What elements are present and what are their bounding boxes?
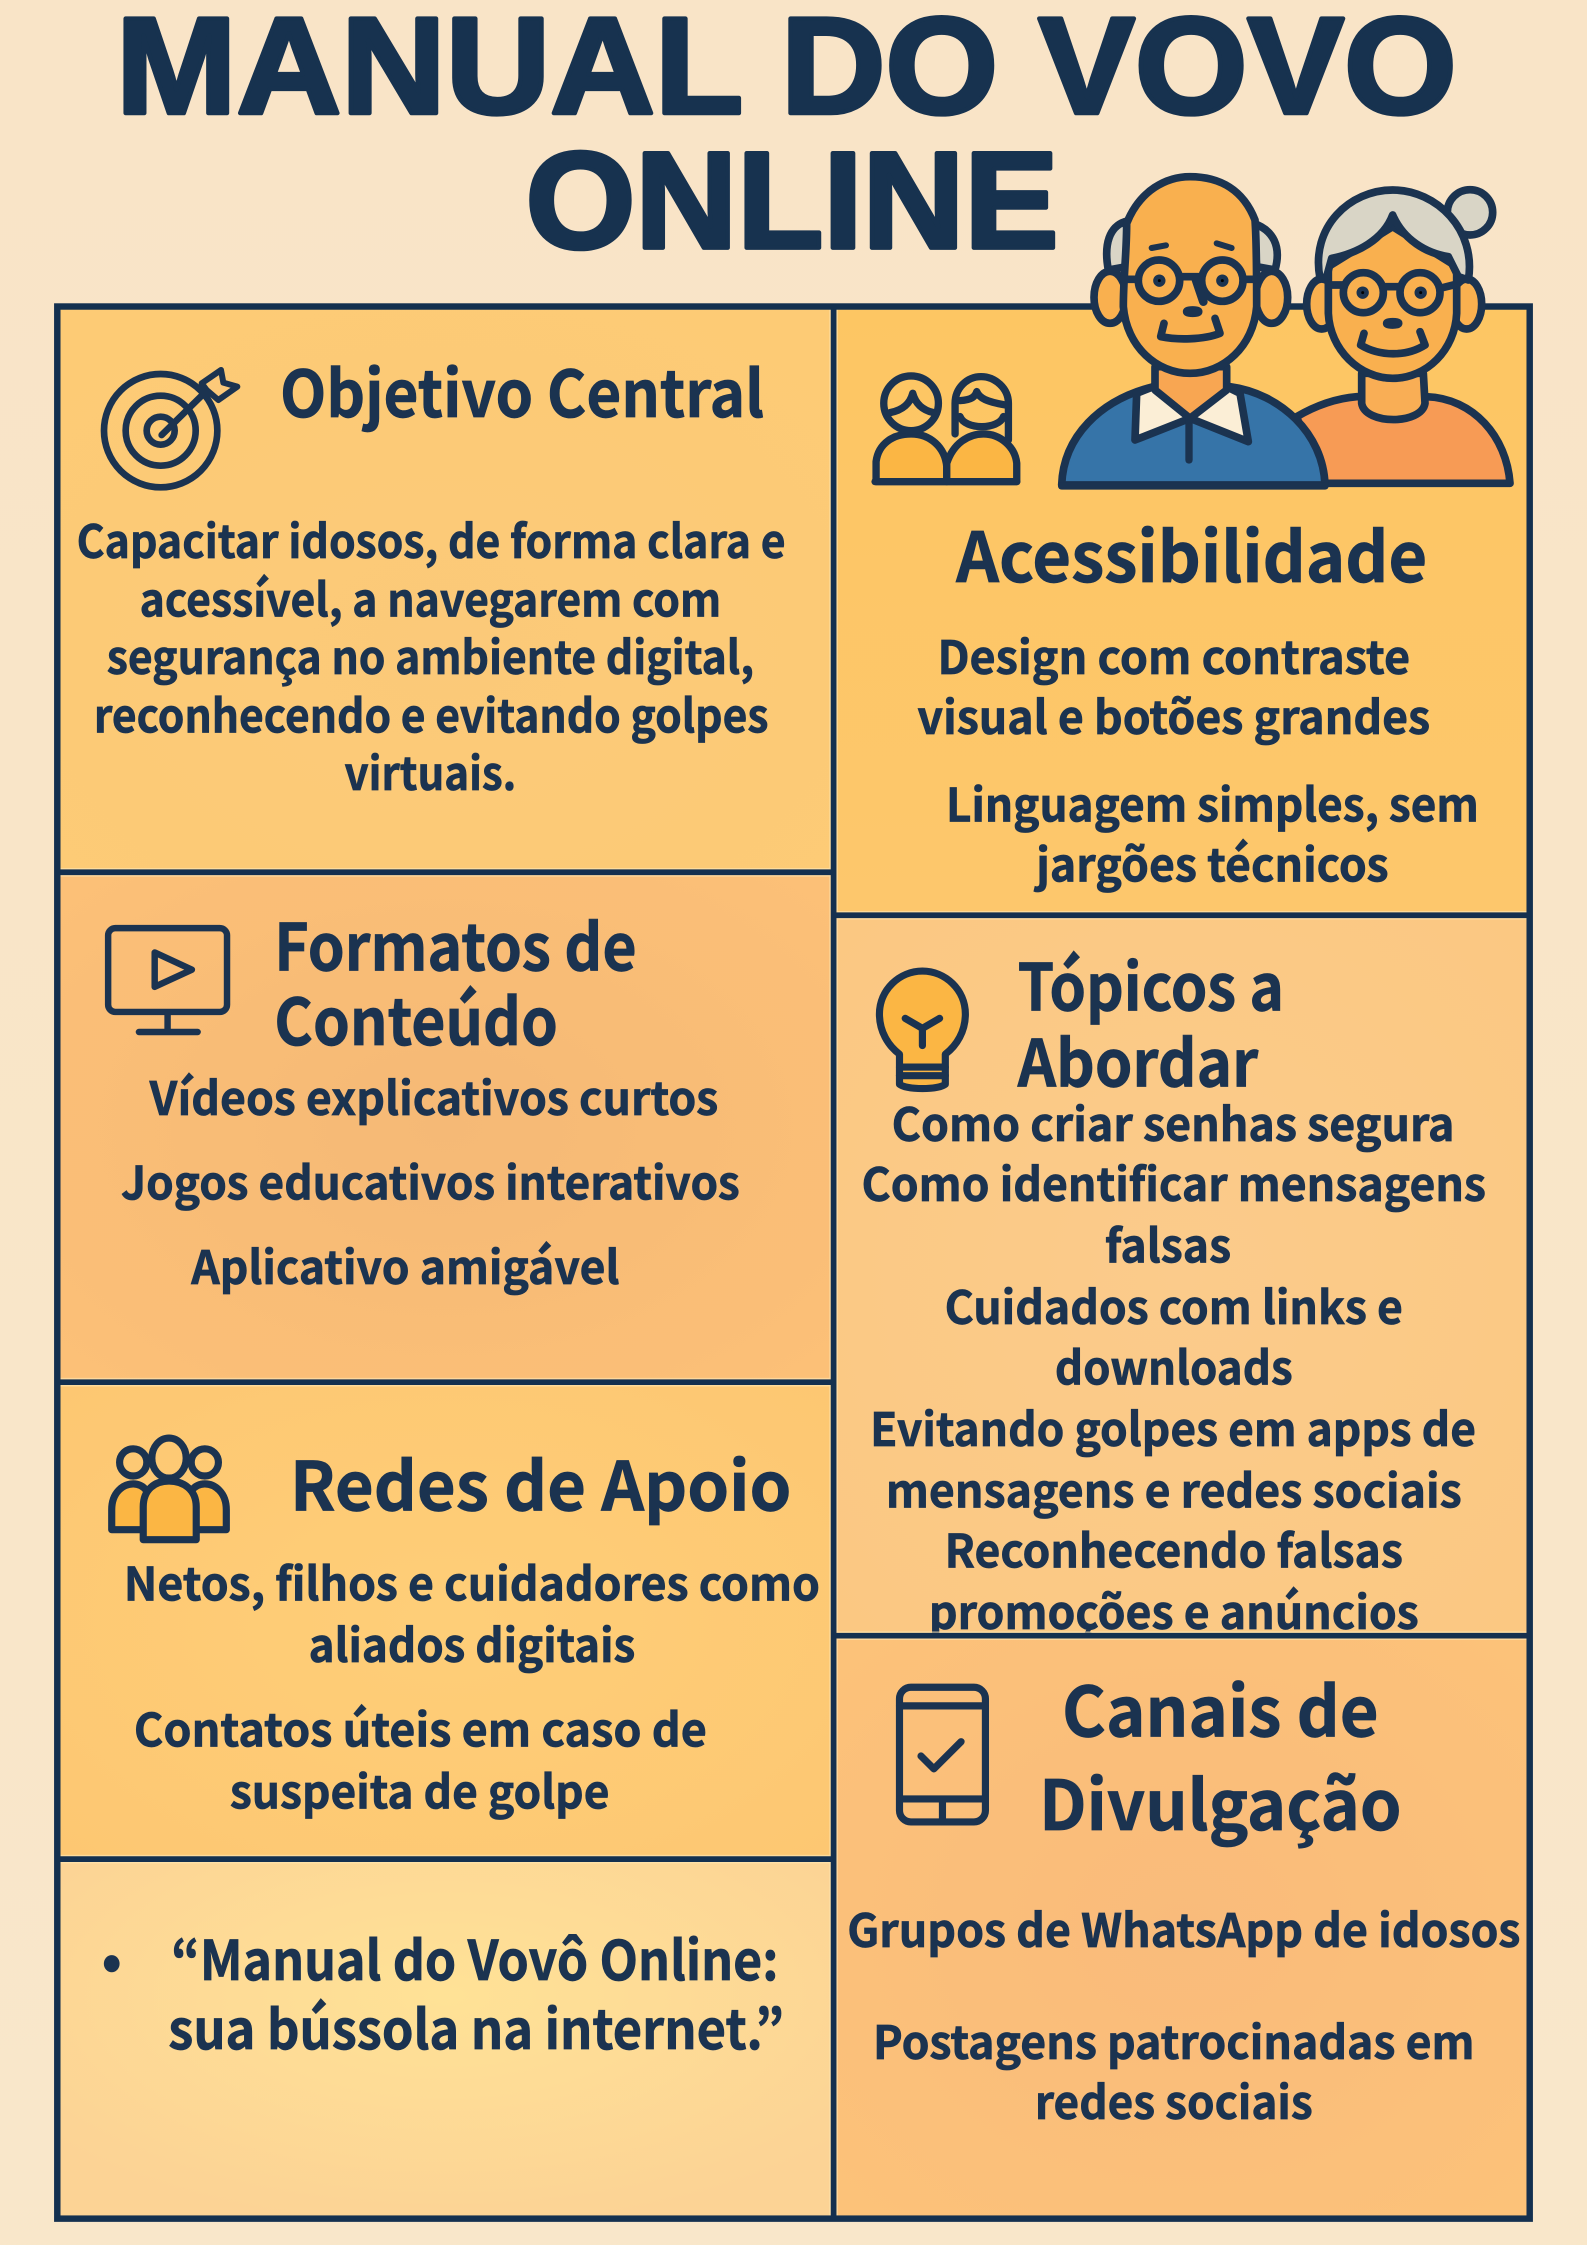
text block: Evitando golpes em apps de [870, 1394, 1476, 1460]
text block: suspeita de golpe [230, 1756, 609, 1822]
text block [917, 622, 1479, 896]
icon: light bulb [879, 971, 965, 1089]
text block: falsas [1105, 1211, 1231, 1277]
text block: Vídeos explicativos curtos [149, 1063, 718, 1129]
text block: aliados digitais [309, 1610, 635, 1676]
text block [77, 506, 786, 804]
text block: acessível, a navegarem com [140, 565, 721, 631]
text block: Linguagem simples, sem [946, 769, 1479, 835]
text block: promoções e anúncios [929, 1577, 1419, 1643]
text block: Postagens patrocinadas em [873, 2007, 1475, 2073]
panel: Tópicos a Abordar [834, 915, 1530, 1643]
quote [168, 1917, 784, 2065]
title: ONLINE [526, 125, 1058, 278]
heading: Divulgação [1039, 1750, 1402, 1850]
icon: smartphone with check mark [899, 1687, 985, 1822]
quote: sua bússola na internet.” [168, 1986, 784, 2065]
grandmother [1297, 190, 1510, 483]
text block [847, 1895, 1520, 2133]
icon: target with arrow [104, 370, 237, 487]
quote: “Manual do Vovô Online: [171, 1917, 778, 1996]
panel: Redes de Apoio [57, 1382, 834, 1859]
title [116, 0, 1457, 278]
text block [121, 1063, 740, 1298]
text block: Aplicativo amigável [190, 1232, 619, 1298]
panel: Objetivo Central [57, 307, 834, 872]
text block: redes sociais [1035, 2067, 1313, 2133]
text block: Como criar senhas segura [892, 1089, 1455, 1155]
text block [124, 1549, 820, 1822]
text block: jargões técnicos [1033, 830, 1389, 896]
text block: Contatos úteis em caso de [134, 1695, 707, 1761]
illustration: elderly couple [1062, 177, 1510, 486]
icon: two people [875, 376, 1017, 482]
heading: Tópicos a [1018, 935, 1284, 1029]
text block: segurança no ambiente digital, [107, 622, 754, 688]
panel: Canais de Divulgação [834, 1636, 1530, 2219]
heading [1017, 935, 1284, 1105]
heading: Conteúdo [274, 970, 558, 1064]
heading: Canais de [1062, 1657, 1379, 1757]
text block: Grupos de WhatsApp de idosos [847, 1895, 1520, 1961]
heading [1039, 1657, 1402, 1850]
panel: slogan [57, 1859, 834, 2219]
panel: Formatos de Conteúdo [57, 872, 834, 1382]
grandfather [1062, 177, 1325, 486]
text block: visual e botões grandes [917, 682, 1430, 748]
text block: Netos, filhos e cuidadores como [124, 1549, 820, 1615]
heading: Acessibilidade [955, 502, 1427, 602]
heading: Formatos de [274, 895, 637, 989]
text block: Como identificar mensagens [862, 1149, 1486, 1215]
text block: mensagens e redes sociais [886, 1456, 1462, 1522]
text block: Cuidados com links e [945, 1272, 1403, 1338]
text block: Capacitar idosos, de forma clara e [77, 506, 786, 572]
text block: downloads [1055, 1332, 1293, 1398]
heading [274, 895, 637, 1064]
text block: Reconhecendo falsas [945, 1516, 1403, 1582]
text block: Design com contraste [937, 622, 1410, 688]
text block: reconhecendo e evitando golpes [94, 681, 768, 747]
panel: Acessibilidade [834, 307, 1530, 915]
heading: Objetivo Central [280, 342, 764, 436]
bullet [104, 1955, 120, 1972]
heading: Redes de Apoio [290, 1433, 791, 1530]
text block: virtuais. [344, 738, 516, 804]
icon: video monitor [108, 928, 227, 1032]
text block [862, 1089, 1486, 1643]
heading: Abordar [1017, 1011, 1259, 1105]
text block: Jogos educativos interativos [121, 1148, 740, 1214]
icon: group of people [112, 1438, 226, 1540]
